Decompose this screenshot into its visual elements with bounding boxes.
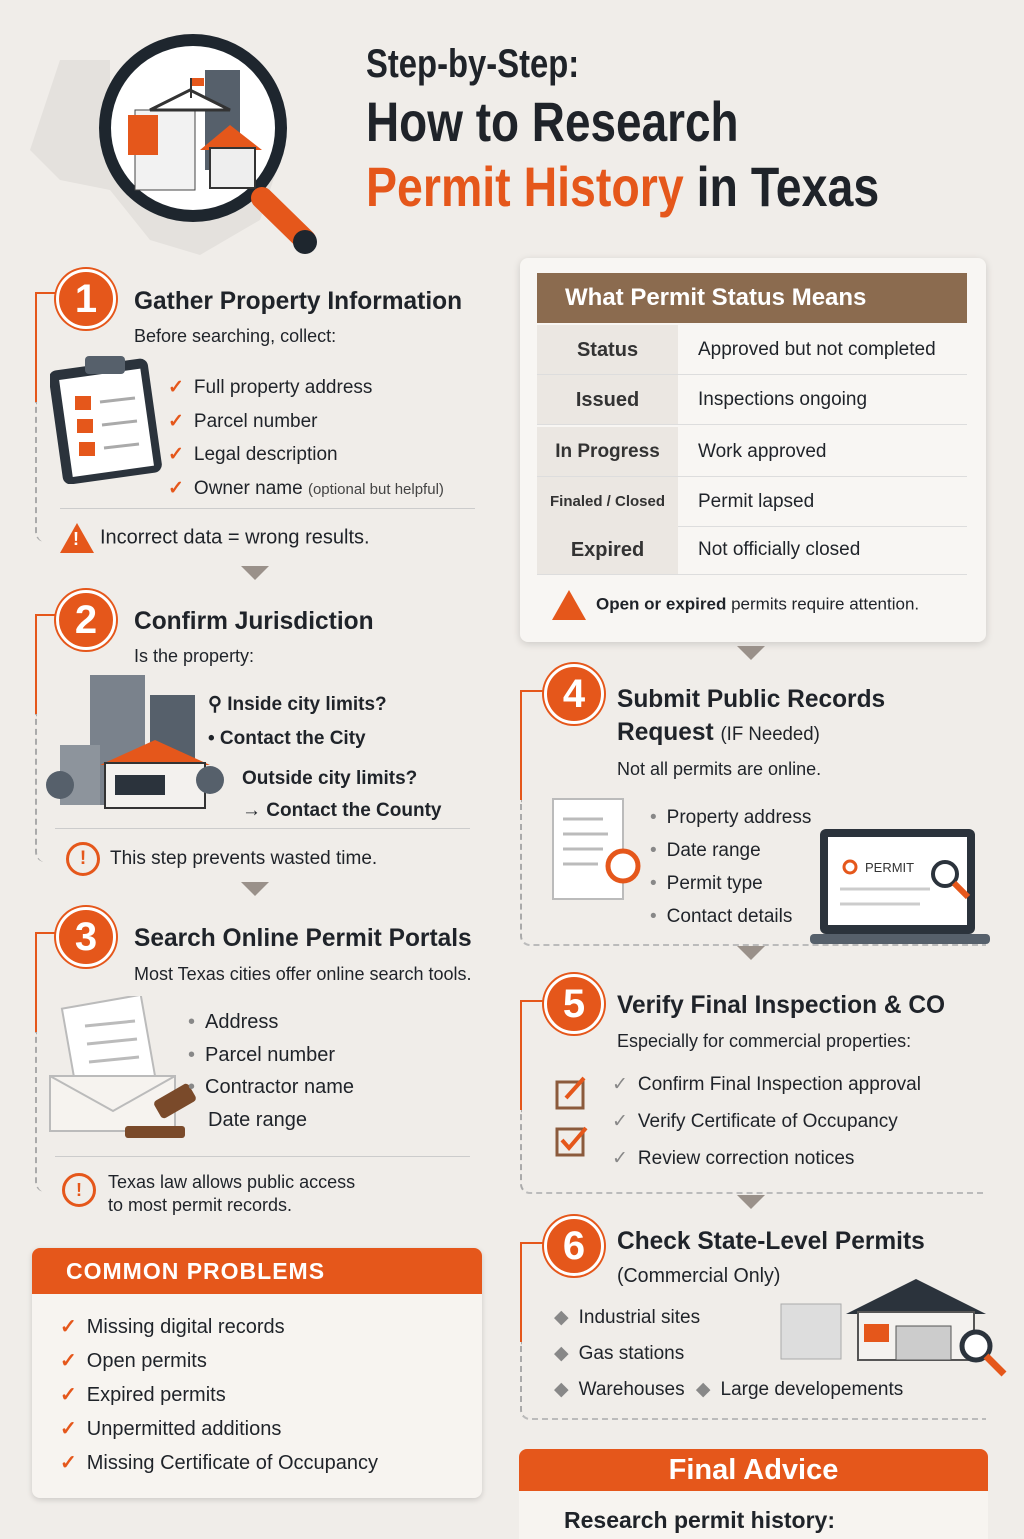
step 2: ⚲ Inside city limits? (208, 694, 387, 715)
step 3 (35, 905, 472, 1215)
panel: common problems: ✓ Missing digital records (60, 1316, 285, 1338)
step 2: Outside city limits? (242, 768, 417, 789)
step 4: • Permit type (650, 873, 763, 894)
step 3 number (56, 907, 116, 967)
icon: warehouse with magnifier (780, 1279, 1006, 1376)
step 5 heading: Verify Final Inspection & CO (617, 991, 945, 1019)
step 1 number: 1 (75, 277, 97, 321)
step 2 number: 2 (75, 598, 97, 642)
step 6: ◆ Gas stations (554, 1343, 684, 1364)
table warning (552, 590, 919, 620)
step 6 heading (617, 1227, 925, 1287)
step 5: ✓ Review correction notices (612, 1148, 854, 1169)
text: Approved but not completed (698, 339, 936, 360)
panel: common problems: ✓ Open permits (60, 1350, 207, 1372)
icon: city buildings (46, 675, 224, 809)
panel: common problems (32, 1248, 482, 1498)
step 3: Date range (208, 1108, 307, 1130)
step 3 heading: Search Online Permit Portals (134, 924, 472, 952)
icon: document with magnifier (552, 798, 640, 900)
icon: laptop with permit (810, 829, 990, 944)
panel: final advice: Final Advice (669, 1454, 838, 1486)
step 2: → Contact the County (242, 800, 442, 821)
step 4: • Date range (650, 840, 761, 861)
title: How to Research (366, 90, 739, 153)
tip: to most permit records. (108, 1195, 292, 1215)
step 1 heading: Gather Property Information (134, 287, 462, 315)
checklist: ✓ Full property address (168, 377, 372, 398)
table warning: Open or expired permits require attention. (596, 594, 919, 613)
title (366, 42, 879, 218)
tip: ! (80, 848, 86, 869)
tip (66, 842, 377, 876)
step 6: ◆ Warehouses ◆ Large developements (554, 1379, 903, 1400)
tip: ! (76, 1180, 82, 1200)
step 4: • Property address (650, 807, 811, 828)
step 6: ◆ Industrial sites (554, 1307, 700, 1328)
step 2: • Contact the City (208, 728, 366, 749)
step 3: Most Texas cities offer online search tools. (134, 964, 472, 984)
step 1 number (56, 269, 116, 329)
text: Permit lapsed (698, 491, 814, 512)
text: Inspections ongoing (698, 389, 867, 410)
step 5 number (544, 974, 604, 1034)
step 6 number (544, 1216, 604, 1276)
step 3: • Address (188, 1011, 278, 1033)
step 3 number: 3 (75, 915, 97, 959)
step 4 (520, 662, 990, 946)
step 4: • Contact details (650, 906, 792, 927)
step 5: Especially for commercial properties: (617, 1031, 911, 1051)
step 5: ✓ Confirm Final Inspection approval (612, 1074, 921, 1095)
step 2: Is the property: (134, 646, 254, 666)
step 4 number (544, 664, 604, 724)
step 1: Before searching, collect: (134, 326, 336, 346)
panel: final advice (519, 1449, 988, 1539)
tip (62, 1172, 355, 1215)
step 4: Not all permits are online. (617, 759, 821, 779)
step 1 (35, 267, 475, 553)
tip: This step prevents wasted time. (110, 848, 377, 869)
tip: Texas law allows public access (108, 1172, 355, 1192)
icon: documents and gavel (49, 996, 196, 1138)
step 2 heading: Confirm Jurisdiction (134, 607, 374, 635)
panel: common problems: ✓ Unpermitted additions (60, 1418, 281, 1440)
icon: laptop with permit: PERMIT (865, 860, 914, 875)
icon: clipboard (50, 356, 162, 484)
step 5 number: 5 (563, 982, 585, 1026)
header illustration: magnifying glass over Texas (30, 34, 317, 255)
step 2 number (56, 590, 116, 650)
text: Work approved (698, 441, 826, 462)
panel: final advice: Research permit history: (564, 1507, 835, 1533)
warning: ! (73, 529, 79, 549)
text: Not officially closed (698, 539, 860, 560)
title: Step-by-Step: (366, 42, 579, 86)
text: Status (577, 339, 638, 361)
checklist (168, 377, 444, 499)
step 4 heading (617, 685, 885, 746)
checklist: ✓ Parcel number (168, 411, 317, 432)
icons: checkbox edits (556, 1076, 588, 1156)
step 4 heading: Submit Public Records (617, 685, 885, 713)
step 6 (520, 1214, 1006, 1420)
text: Issued (576, 389, 639, 411)
step 4 number: 4 (563, 672, 585, 716)
warning (60, 523, 370, 553)
checklist: ✓ Legal description (168, 444, 338, 465)
warning: Incorrect data = wrong results. (100, 526, 370, 548)
step 2 (35, 588, 470, 876)
text: Expired (571, 539, 644, 561)
text: Finaled / Closed (550, 493, 665, 510)
step 5: ✓ Verify Certificate of Occupancy (612, 1111, 898, 1132)
step 6 number: 6 (563, 1224, 585, 1268)
step 5 (520, 972, 983, 1194)
text: In Progress (555, 441, 660, 462)
panel: permit status table (520, 258, 986, 642)
step 6 heading: (Commercial Only) (617, 1265, 780, 1287)
panel: common problems: COMMON PROBLEMS (66, 1258, 325, 1284)
step 4 heading: Request (IF Needed) (617, 718, 820, 746)
title: Permit History in Texas (366, 155, 879, 218)
text: What Permit Status Means (565, 284, 866, 311)
step 3: • Contractor name (188, 1076, 354, 1098)
step 6 heading: Check State-Level Permits (617, 1227, 925, 1255)
panel: common problems: ✓ Expired permits (60, 1384, 226, 1406)
panel: common problems: ✓ Missing Certificate of Occupancy (60, 1452, 378, 1474)
checklist: ✓ Owner name (optional but helpful) (168, 478, 444, 499)
step 3: • Parcel number (188, 1044, 335, 1066)
